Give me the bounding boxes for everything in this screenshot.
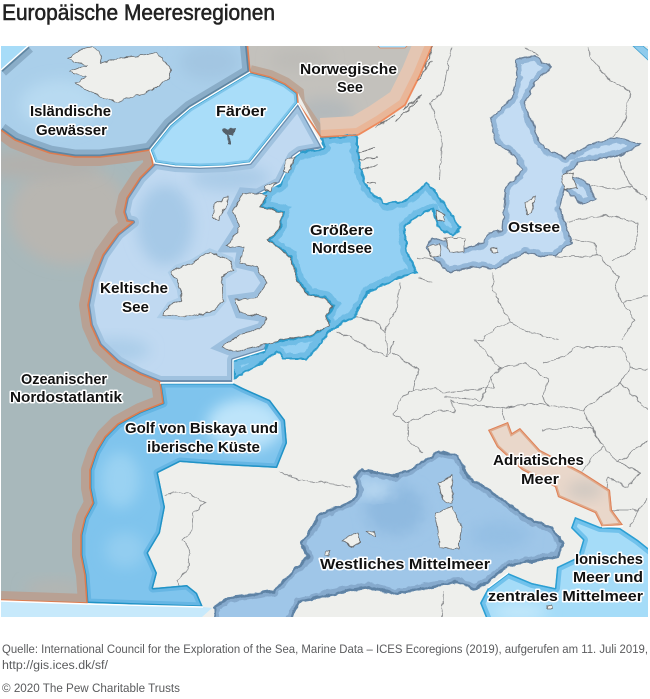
region: Norwegische See: [248, 46, 431, 136]
label: Ionisches Meer und zentrales Mittelmeer: Meer und: [573, 569, 643, 586]
region: Adriatisches Meer: [488, 422, 623, 527]
land: Scandinavian fjords: [358, 46, 433, 184]
region: Westliches Mittelmeer: [213, 450, 564, 617]
label: Adriatisches Meer: [493, 452, 584, 488]
label: Ozeanischer Nordostatlantik: [10, 371, 123, 406]
region: Ozeanischer Nordostatlantik: [0, 120, 163, 603]
region: Grönlandsee corner: [1, 46, 29, 71]
label: Norwegische See: See: [337, 79, 363, 96]
label: Ostsee: Ostsee: [508, 219, 560, 236]
label: Norwegische See: Norwegische: [300, 61, 397, 78]
title: Europäische Meeresregionen: [2, 0, 275, 25]
land: Great Britain: [222, 193, 332, 352]
label: Größere Nordsee: Nordsee: [312, 240, 372, 257]
boundary lines: [1, 30, 623, 607]
label: Ionisches Meer und zentrales Mittelmeer: zentrales Mittelmeer: [488, 588, 643, 605]
label: Färöer: Färöer: [216, 103, 266, 120]
source note: http://gis.ices.dk/sf/: [2, 658, 109, 672]
label: Isländische Gewässer: Gewässer: [36, 122, 107, 139]
label: Adriatisches Meer: Meer: [521, 471, 559, 488]
label: Isländische Gewässer: Isländische: [30, 103, 111, 120]
label: Keltische See: Keltische: [100, 280, 168, 297]
land: Ireland: [163, 252, 233, 317]
label: Größere Nordsee: [310, 222, 373, 257]
label: Westliches Mittelmeer: Westliches Mittelmeer: [320, 556, 490, 573]
label: Golf von Biskaya und iberische Küste: iberische Küste: [147, 439, 260, 456]
label: Ozeanischer Nordostatlantik: Ozeanischer: [21, 371, 107, 388]
copyright: © 2020 The Pew Charitable Trusts: [2, 681, 180, 695]
land: islands: [213, 157, 578, 608]
region: Ostsee: [425, 55, 642, 272]
label: Ozeanischer Nordostatlantik: Nordostatlantik: [10, 389, 123, 406]
country borders: [165, 47, 648, 617]
region: Ionisches Meer und zentrales Mittelmeer: [480, 517, 648, 617]
label: Adriatisches Meer: Adriatisches: [493, 452, 584, 469]
region: Größere Nordsee: [222, 135, 462, 382]
label: Größere Nordsee: Größere: [310, 222, 373, 239]
region: bottom strip: [1, 601, 212, 617]
label: Ionisches Meer und zentrales Mittelmeer: [488, 551, 643, 605]
region: Golf von Biskaya und iberische Küste: [81, 383, 287, 607]
region: Färöer: [150, 72, 298, 167]
source note: [2, 642, 648, 672]
land: Faroe Islands: [222, 128, 236, 145]
region: Weißes Meer: [633, 46, 650, 60]
region: Keltische See: [80, 103, 332, 382]
label: Ionisches Meer und zentrales Mittelmeer: Ionisches: [575, 551, 643, 568]
land: Iceland: [68, 47, 170, 102]
label: Norwegische See: [300, 61, 397, 96]
region: Isländische Gewässer: [1, 46, 250, 156]
label: Keltische See: [100, 280, 168, 316]
label: Golf von Biskaya und iberische Küste: [125, 420, 278, 456]
label: Isländische Gewässer: [30, 103, 111, 139]
label: Golf von Biskaya und iberische Küste: Golf von Biskaya und: [125, 420, 278, 437]
region: top sliver: [378, 46, 408, 48]
label: Keltische See: See: [122, 299, 149, 316]
